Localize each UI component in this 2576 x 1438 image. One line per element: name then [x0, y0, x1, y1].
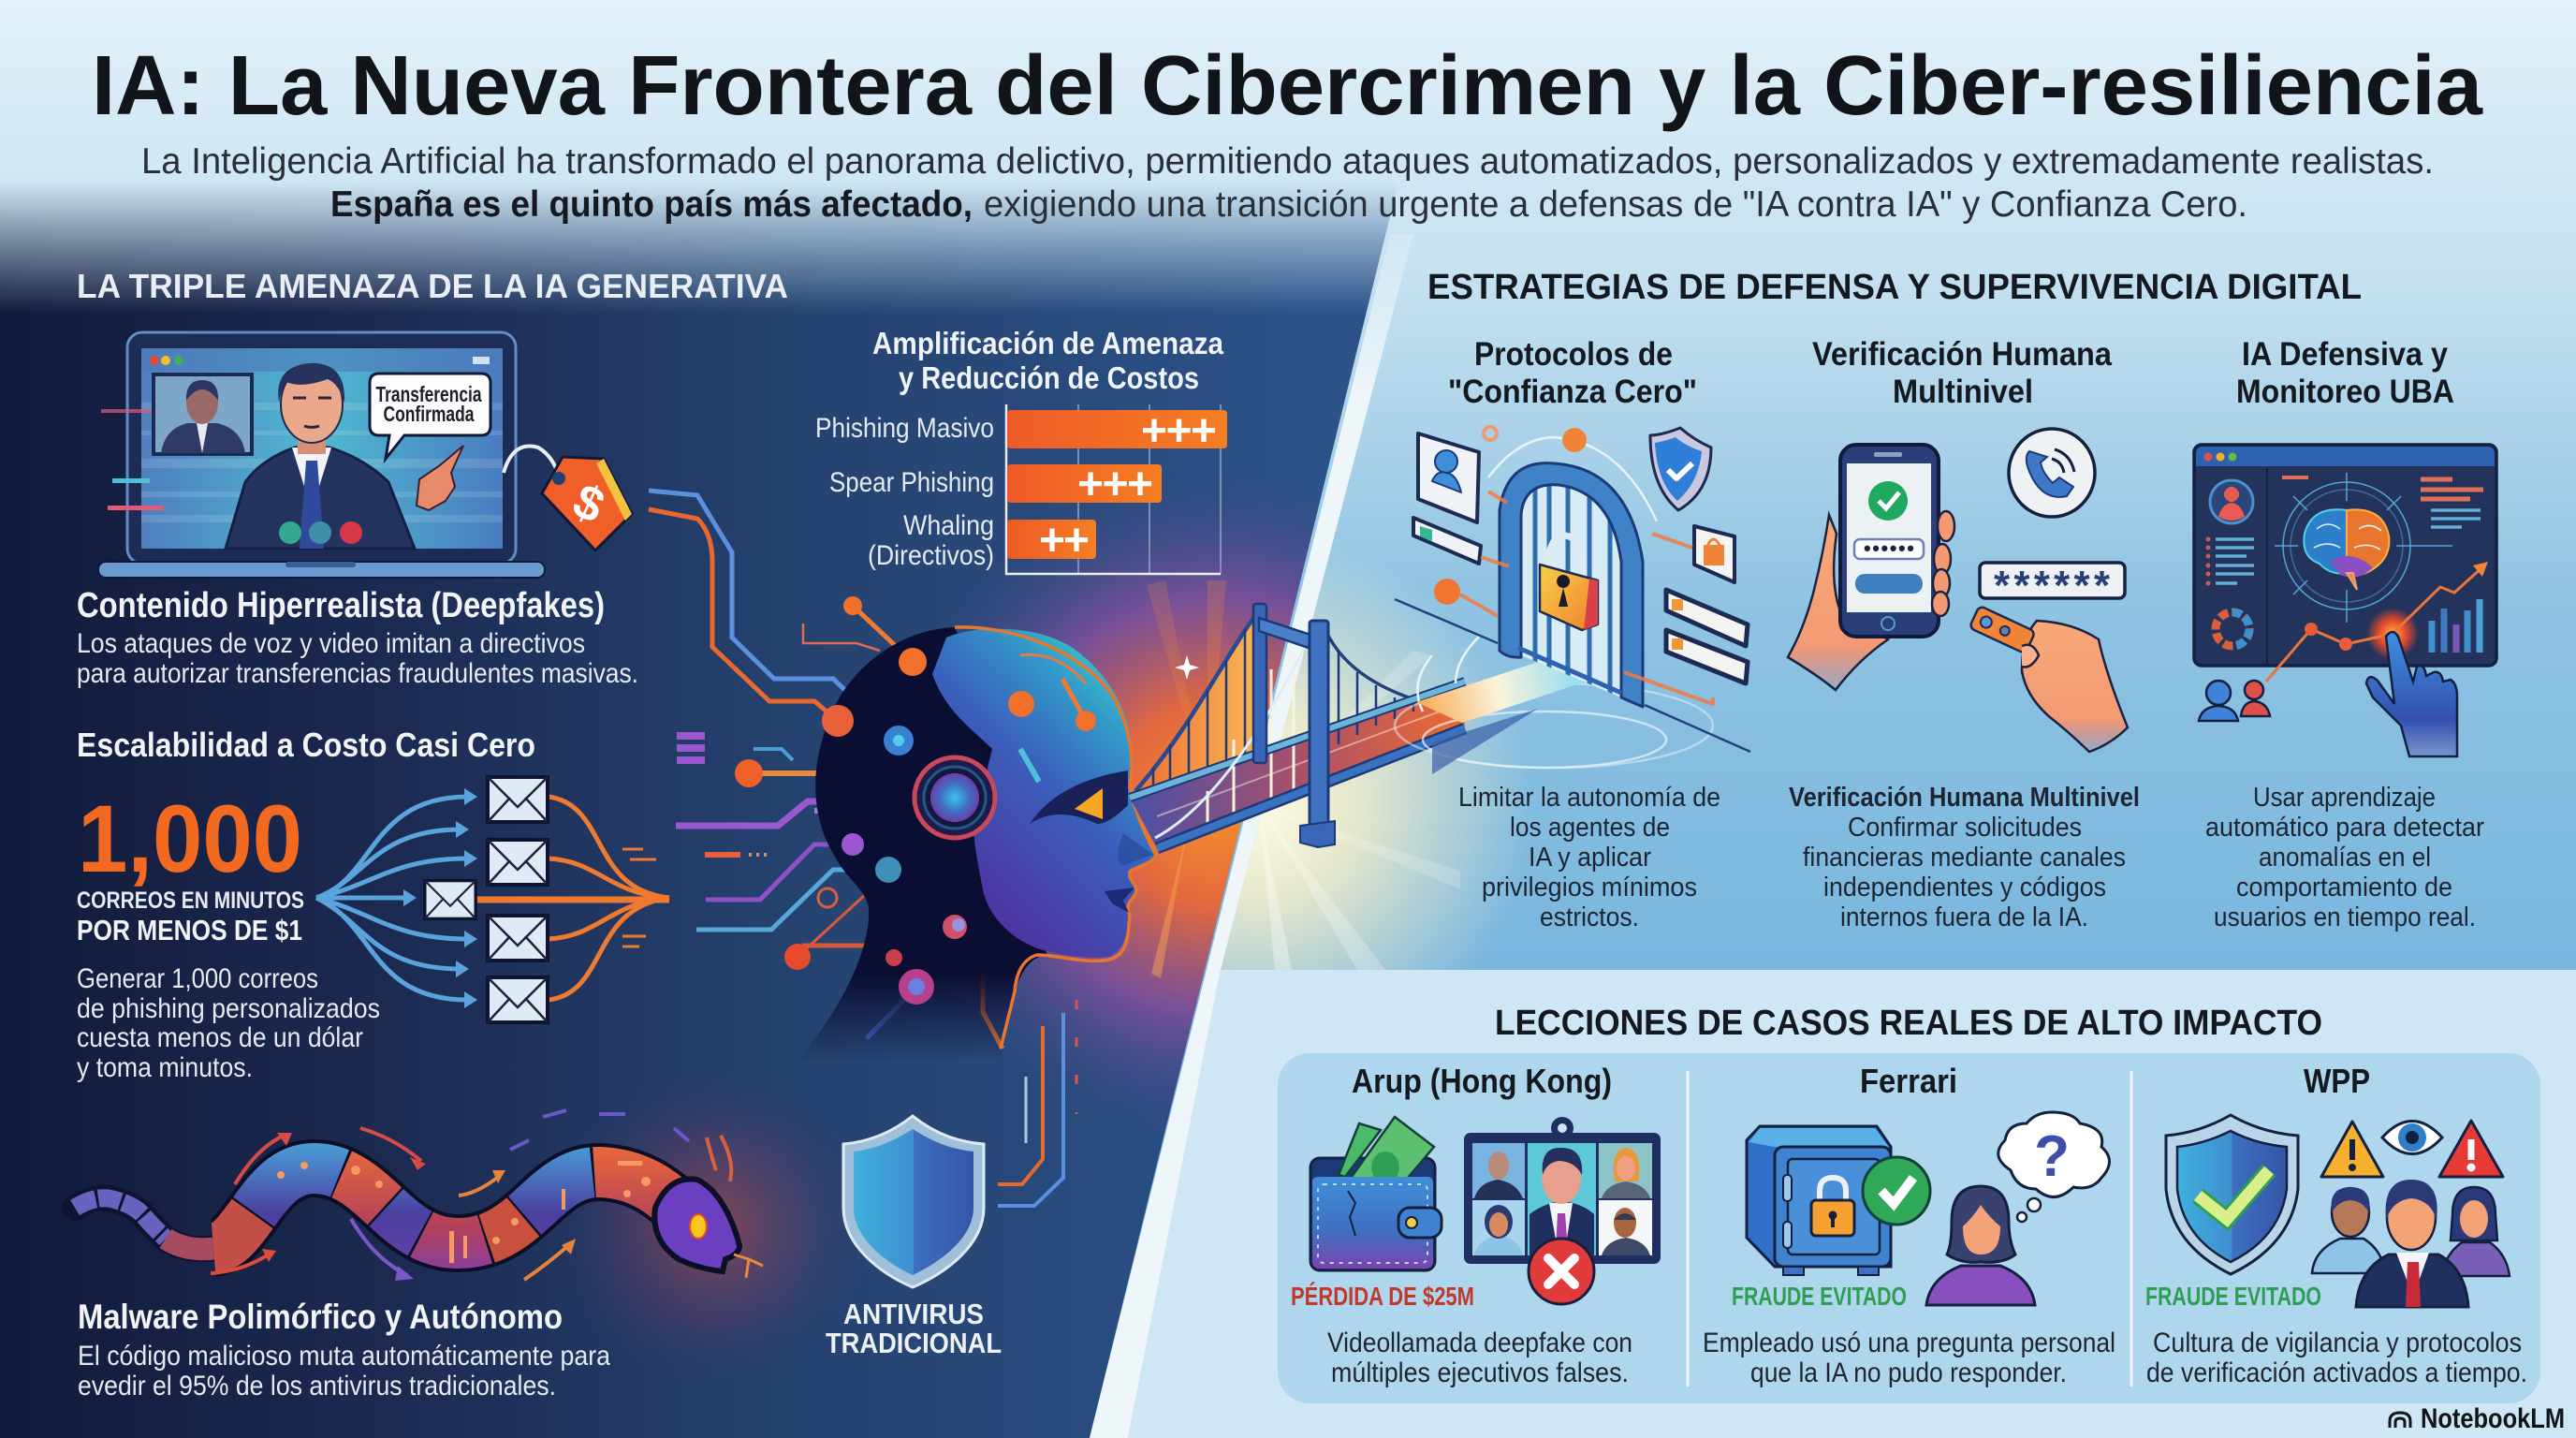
subtitle: España es el quinto país más afectado, — [330, 184, 973, 225]
text block: scalability: de phishing personalizados — [77, 993, 380, 1024]
text block: scalability: Escalabilidad a Costo Casi Cero — [77, 726, 535, 764]
icon: password field: ****** — [1994, 563, 2111, 609]
bar chart: Spear Phishing — [829, 467, 994, 498]
text block: deepfakes — [77, 586, 638, 689]
text block: scalability: POR MENOS DE $1 — [77, 914, 302, 946]
loss label: PÉRDIDA DE $25M — [1291, 1282, 1474, 1311]
column heading: human verification: Multinivel — [1893, 374, 2033, 410]
icon: traditional antivirus shield — [843, 1000, 1076, 1287]
text block: deepfakes: Los ataques de voz y video imitan a directivos — [77, 628, 585, 659]
title: IA: La Nueva Frontera del Cibercrimen y la Ciber-resiliencia — [92, 39, 2483, 133]
icon: deepfake laptop — [98, 332, 545, 578]
case: WPP: WPP — [2304, 1062, 2370, 1100]
icon: phone in hand: •••••• — [1864, 536, 1914, 560]
icon: polymorphic snake — [75, 1067, 871, 1386]
chart: amplification heading — [872, 326, 1224, 395]
case: Arup: Arup (Hong Kong) — [1352, 1062, 1612, 1100]
case text: WPP — [2146, 1328, 2527, 1388]
column heading: human verification: Verificación Humana — [1812, 336, 2112, 373]
heading: case lessons: LECCIONES DE CASOS REALES DE ALTO IMPACTO — [1495, 1004, 2322, 1043]
icon: deepfake laptop: Transferencia — [376, 382, 482, 406]
case text: Arup — [1327, 1328, 1632, 1388]
icon: touching hand — [2366, 632, 2457, 756]
column heading: zero trust: Protocolos de — [1474, 336, 1673, 373]
label: antivirus: TRADICIONAL — [826, 1327, 1002, 1359]
text: zero trust body: los agentes de — [1510, 813, 1670, 843]
icon: bridge — [1130, 604, 1465, 848]
icon: deepfake laptop: Confirmada — [384, 402, 475, 426]
subtitle: La Inteligencia Artificial ha transformado el panorama delictivo, permitiendo ataques automatizados, personalizados y extremadamente realistas. — [141, 141, 2434, 182]
label: antivirus — [826, 1298, 1002, 1359]
text block: malware: evedir el 95% de los antivirus tradicionales. — [78, 1371, 556, 1401]
bar chart: +++ — [1077, 460, 1153, 509]
text: zero trust body: IA y aplicar — [1529, 843, 1651, 873]
text block: deepfakes: Contenido Hiperrealista (Deepfakes) — [77, 586, 605, 625]
panel: zero trust — [1395, 336, 1750, 932]
white diagonal strip — [1090, 234, 1413, 1438]
text block: scalability: 1,000 — [78, 785, 302, 892]
case text: WPP: Cultura de vigilancia y protocolos — [2153, 1328, 2522, 1358]
text: zero trust body: Limitar la autonomía de — [1458, 783, 1720, 813]
icon: price tag — [504, 447, 632, 550]
case text: WPP: de verificación activados a tiempo. — [2146, 1357, 2527, 1388]
bar chart: Whaling — [903, 510, 994, 541]
icon: shield with check — [2166, 1115, 2298, 1274]
text block: scalability: cuesta menos de un dólar — [77, 1022, 363, 1053]
text: defensive AI body — [2205, 783, 2484, 932]
text: defensive AI body: Usar aprendizaje — [2253, 783, 2436, 813]
text: defensive AI body: anomalías en el — [2259, 843, 2431, 873]
icon: warning signs and eye — [2321, 1121, 2503, 1177]
column heading: zero trust: "Confianza Cero" — [1448, 374, 1697, 410]
case: Ferrari — [1703, 1062, 2115, 1388]
panel: dark threat side — [0, 187, 1397, 1438]
panel: case studies card — [1278, 1053, 2540, 1403]
icon: AI head silhouette — [677, 596, 1156, 1062]
column heading: defensive AI — [2236, 336, 2454, 410]
case: Ferrari: Ferrari — [1860, 1062, 1957, 1100]
icon: UBA dashboard — [2194, 445, 2496, 682]
case text: Ferrari: Empleado usó una pregunta personal — [1703, 1328, 2115, 1358]
text: zero trust body: estrictos. — [1540, 902, 1639, 932]
panel: lower cases background — [1128, 970, 2576, 1438]
icon: phone in hand — [1788, 445, 1954, 690]
case text: Ferrari: que la IA no pudo responder. — [1750, 1357, 2067, 1388]
column heading: human verification — [1812, 336, 2112, 410]
text block: malware: El código malicioso muta automáticamente para — [78, 1341, 610, 1372]
text: human verification body: Confirmar solicitudes — [1848, 813, 2082, 843]
icon: circuit lines to head — [649, 491, 1048, 1049]
icon: email fan-out diagram — [316, 777, 669, 1022]
icon: phone call — [2009, 429, 2095, 517]
text: human verification body: financieras mediante canales — [1803, 843, 2126, 873]
text: defensive AI body: comportamiento de — [2236, 873, 2452, 902]
heading: defence strategies: ESTRATEGIAS DE DEFENSA Y SUPERVIVENCIA DIGITAL — [1427, 268, 2362, 307]
icon: team of people — [2312, 1180, 2510, 1307]
icon: red cross — [1529, 1239, 1594, 1304]
bar chart: ++ — [1039, 516, 1090, 565]
text block: scalability: y toma minutos. — [77, 1052, 253, 1083]
text: human verification body: independientes y códigos — [1823, 873, 2106, 902]
case text: Arup: múltiples ejecutivos falses. — [1331, 1357, 1629, 1388]
case text: Arup: Videollamada deepfake con — [1327, 1328, 1632, 1358]
bar chart: +++ — [1141, 406, 1217, 456]
text: defensive AI body: automático para detectar — [2205, 813, 2484, 843]
panel: human verification — [1788, 336, 2140, 932]
bar chart: Phishing Masivo — [815, 413, 994, 444]
text block: malware: Malware Polimórfico y Autónomo — [78, 1298, 563, 1336]
text: defensive AI body: usuarios en tiempo real. — [2214, 902, 2476, 932]
column heading: defensive AI: IA Defensiva y — [2242, 336, 2448, 373]
heading: triple threat: LA TRIPLE AMENAZA DE LA IA GENERATIVA — [77, 267, 788, 305]
icon: zero trust gate — [1395, 427, 1750, 774]
label: antivirus: ANTIVIRUS — [843, 1298, 984, 1330]
text: zero trust body — [1458, 783, 1720, 932]
icon: deepfake video call — [1464, 1117, 1661, 1264]
icon: woman and question bubble — [1926, 1112, 2110, 1305]
panel: defensive AI — [2194, 336, 2496, 932]
icon: price tag: $ — [564, 474, 612, 535]
text: human verification body: Verificación Humana Multinivel — [1789, 783, 2140, 813]
text block: scalability — [77, 726, 535, 1083]
prevented label: FRAUDE EVITADO — [1732, 1282, 1907, 1311]
icon: woman and question bubble: ? — [2034, 1124, 2070, 1189]
text: human verification body: internos fuera de la IA. — [1840, 902, 2088, 932]
column heading: zero trust — [1448, 336, 1697, 410]
text block: scalability: CORREOS EN MINUTOS — [77, 888, 304, 914]
icon: safe — [1747, 1126, 1930, 1275]
prevented label: FRAUDE EVITADO — [2145, 1282, 2321, 1311]
column heading: defensive AI: Monitoreo UBA — [2236, 374, 2454, 410]
subtitle: exigiendo una transición urgente a defensas de "IA contra IA" y Confianza Cero. — [984, 184, 2247, 225]
text block: malware — [78, 1298, 610, 1401]
light rays behind bridge — [1221, 562, 1515, 970]
icon: broken wallet — [1310, 1117, 1442, 1270]
text: human verification body — [1789, 783, 2140, 932]
bar chart: (Directivos) — [868, 540, 994, 571]
case: Arup — [1291, 1062, 1661, 1388]
text block: deepfakes: para autorizar transferencias fraudulentes masivas. — [77, 658, 638, 689]
icon: users — [2199, 681, 2270, 721]
text block: scalability: Generar 1,000 correos — [77, 963, 318, 994]
case text: Ferrari — [1703, 1328, 2115, 1388]
text: zero trust body: privilegios mínimos — [1482, 873, 1697, 902]
chart: amplification heading: y Reducción de Costos — [899, 360, 1199, 395]
chart: amplification heading: Amplificación de Amenaza — [872, 326, 1224, 360]
case: WPP — [2145, 1062, 2527, 1388]
subtitle — [141, 141, 2434, 225]
bar chart — [815, 404, 1227, 574]
icon: security key in hand — [1969, 606, 2128, 752]
